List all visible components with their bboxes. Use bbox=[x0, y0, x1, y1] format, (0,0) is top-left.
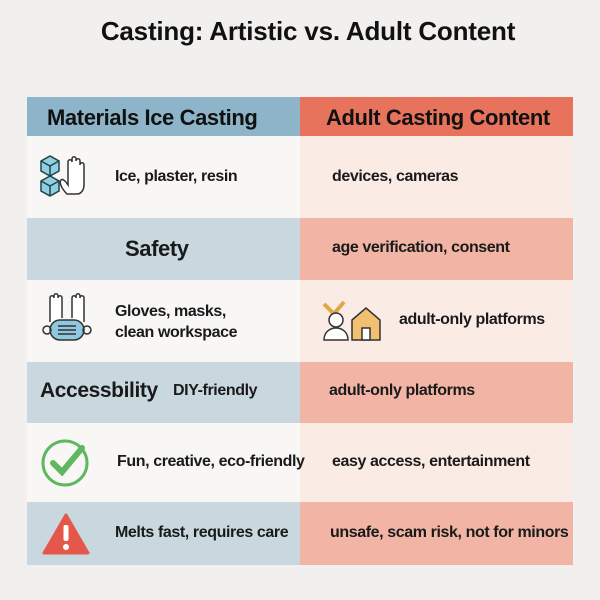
icon: ice cubes and glove bbox=[40, 155, 85, 197]
row 4 accessibility: DIY-friendly bbox=[173, 382, 257, 399]
row 6 risks bbox=[27, 502, 573, 565]
row 1 materials: devices, cameras bbox=[332, 168, 458, 185]
icon: check circle bbox=[42, 440, 88, 486]
title: Casting: Artistic vs. Adult Content bbox=[101, 16, 515, 46]
header right bbox=[300, 97, 573, 136]
header right: Adult Casting Content bbox=[326, 105, 550, 130]
row 1 materials: Ice, plaster, resin bbox=[115, 168, 237, 185]
row 6 risks: unsafe, scam risk, not for minors bbox=[330, 524, 568, 541]
row 3 gloves: adult-only platforms bbox=[399, 311, 545, 328]
row 5 benefits bbox=[42, 423, 573, 502]
row 5 benefits: Fun, creative, eco-friendly bbox=[117, 453, 304, 470]
row 3 gloves: Gloves, masks, bbox=[115, 303, 226, 320]
row 6 risks: Melts fast, requires care bbox=[115, 524, 288, 541]
row 5 benefits: easy access, entertainment bbox=[332, 453, 530, 470]
row 1 materials bbox=[40, 136, 573, 218]
row 2 safety: age verification, consent bbox=[332, 239, 510, 256]
comparison table bbox=[27, 97, 573, 565]
row 4 accessibility: adult-only platforms bbox=[329, 382, 475, 399]
icon: person with wrenches and house bbox=[322, 300, 381, 341]
icon: warning triangle bbox=[42, 513, 90, 554]
row 2 safety: Safety bbox=[125, 236, 189, 261]
row 3 gloves: clean workspace bbox=[115, 324, 237, 341]
row 2 safety bbox=[27, 218, 573, 280]
icon: gloves and mask bbox=[42, 293, 92, 341]
row 4 accessibility bbox=[27, 362, 573, 423]
header left: Materials Ice Casting bbox=[47, 105, 257, 130]
header left bbox=[27, 97, 300, 136]
row 3 gloves bbox=[42, 280, 573, 362]
row 4 accessibility: Accessbility bbox=[40, 379, 158, 402]
